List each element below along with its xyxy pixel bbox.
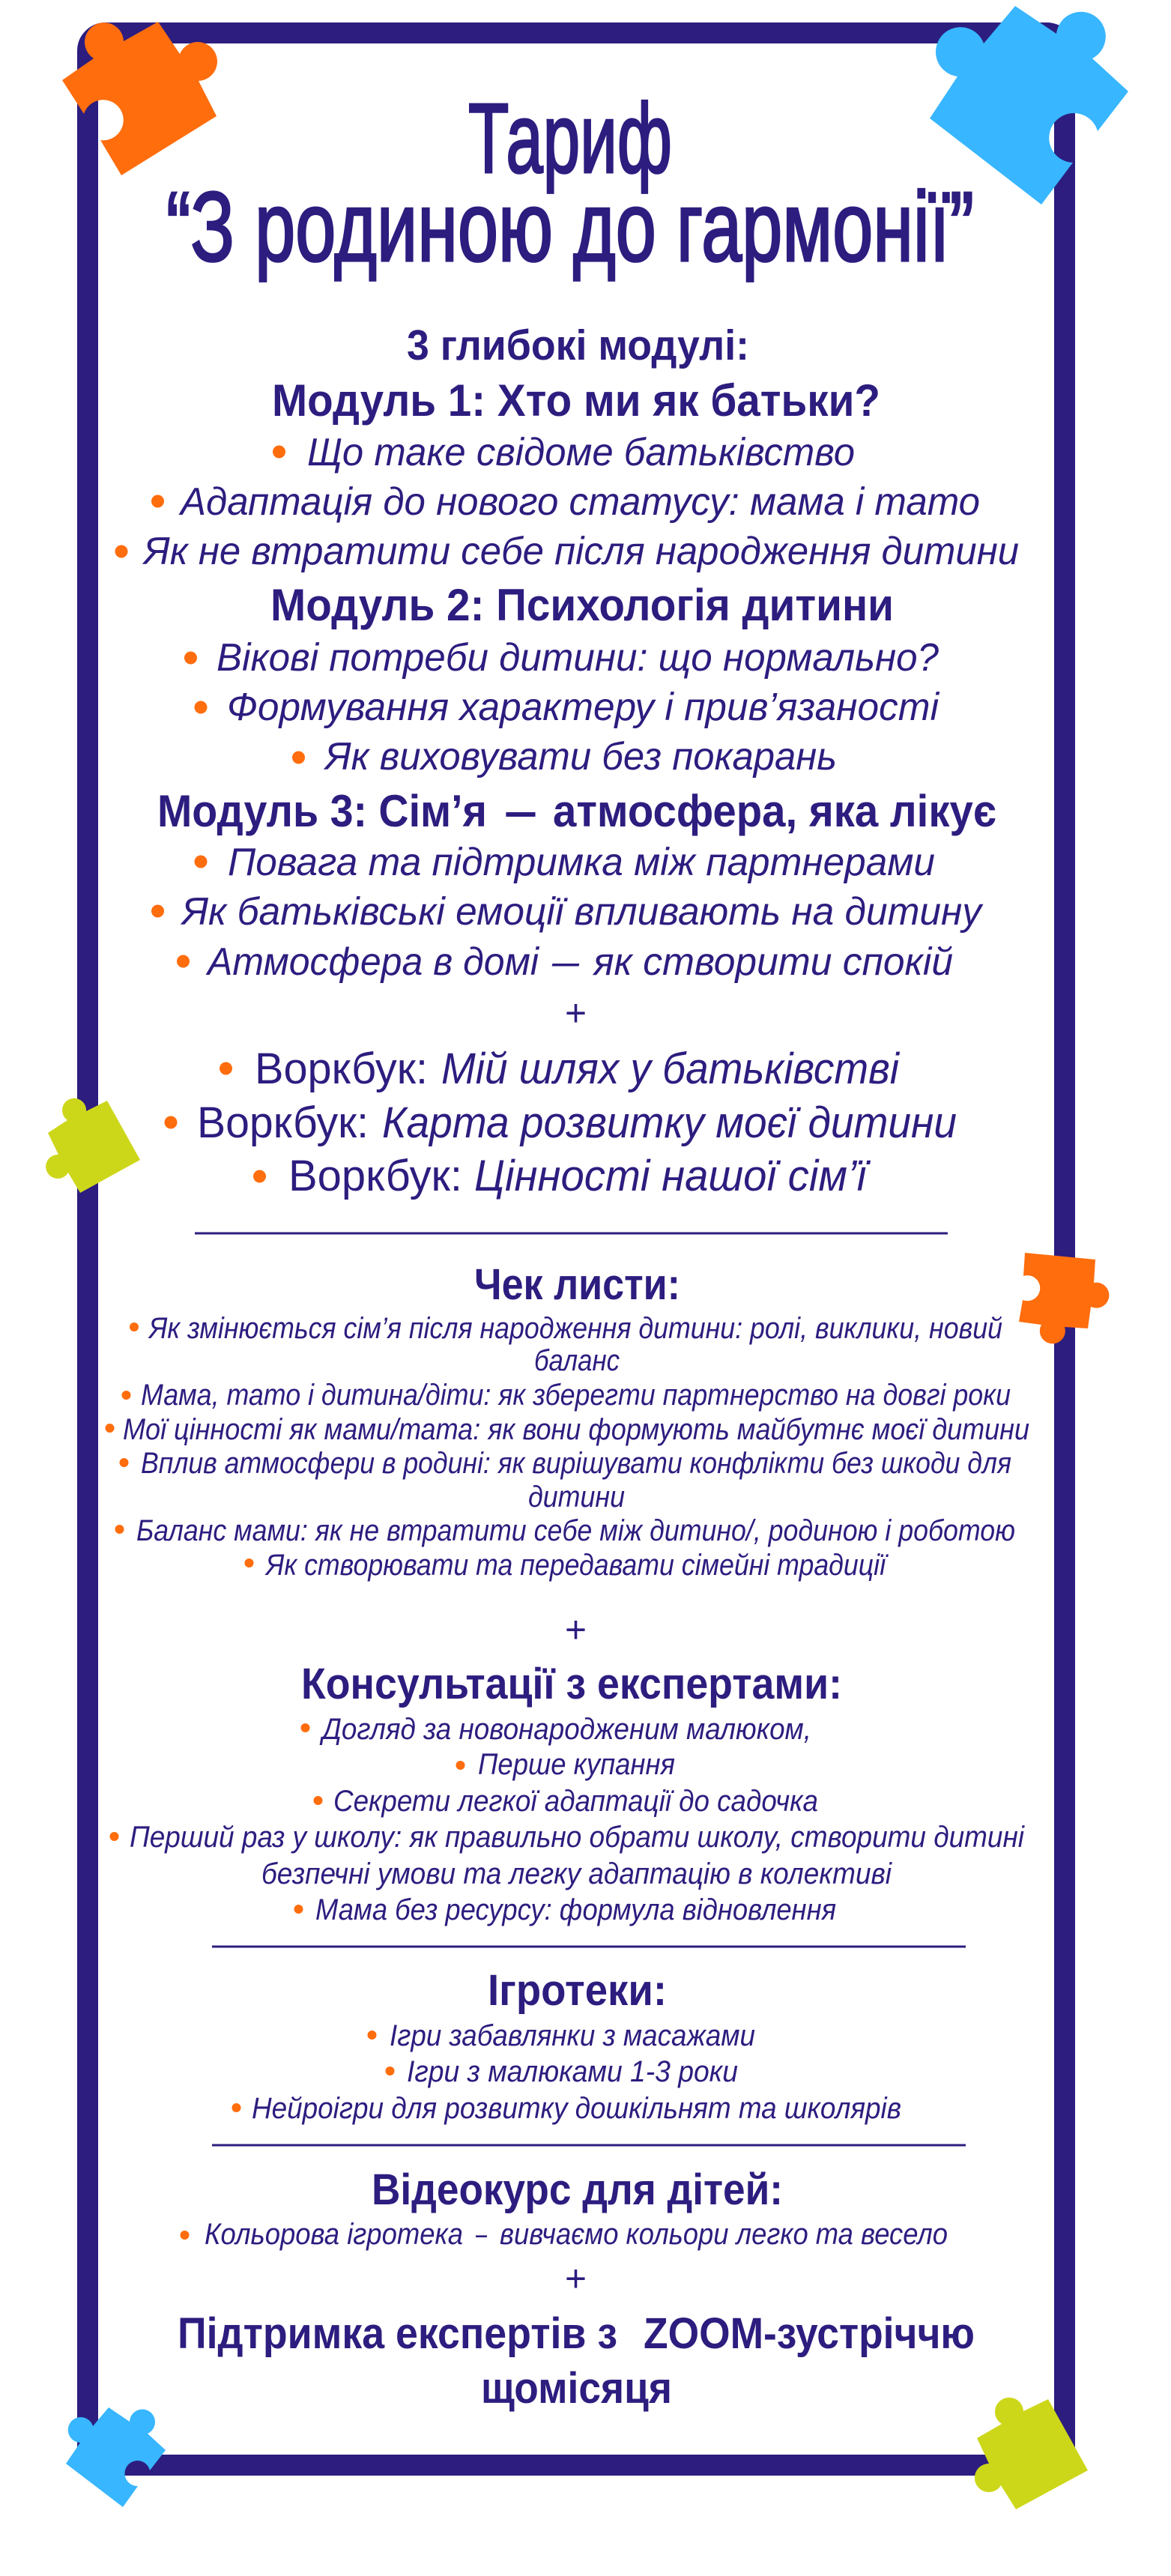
- checklist item: Вплив атмосфери в родині: як вирішувати конфлікти без шкоди для: [141, 1447, 1011, 1480]
- panel: checklists: [105, 1260, 1029, 1582]
- game item: Нейроігри для розвитку дошкільнят та школярів: [252, 2092, 901, 2125]
- heading: module 1: Модуль 1: Хто ми як батьки?: [272, 375, 880, 426]
- panel: expert consultations: [109, 1660, 1025, 1926]
- heading: video course: Відеокурс для дітей:: [372, 2165, 783, 2214]
- consultation item: безпечні умови та легку адаптацію в колективі: [261, 1857, 892, 1890]
- checklist item: Як змінюється сім’я після народження дитини: ролі, виклики, новий: [148, 1312, 1002, 1345]
- consultation item: Перший раз у школу: як правильно обрати школу, створити дитині: [130, 1821, 1025, 1854]
- closing statement: [178, 2309, 975, 2413]
- checklist item: [120, 1447, 1011, 1514]
- plus sign: +: [565, 2258, 587, 2300]
- list item: як створити спокій: [592, 940, 953, 984]
- consultation item: Секрети легкої адаптації до садочка: [333, 1785, 818, 1818]
- video course item: Кольорова ігротека: [205, 2218, 463, 2251]
- icon: blue puzzle piece top right: [930, 6, 1128, 205]
- list item: Вікові потреби дитини: що нормально?: [217, 636, 939, 680]
- consultation item: Перше купання: [478, 1748, 675, 1781]
- video course item: –: [475, 2218, 488, 2251]
- list item: Як не втратити себе після народження дитини: [142, 530, 1019, 573]
- heading: 3 modules: 3 глибокі модулі:: [407, 321, 749, 369]
- list item: [177, 940, 953, 984]
- video course item: [180, 2218, 948, 2251]
- checklist item: Мама, тато і дитина/діти: як зберегти партнерство на довгі роки: [141, 1379, 1011, 1412]
- list item: Як виховувати без покарань: [323, 735, 837, 778]
- heading: module 3: атмосфера, яка лікує: [553, 786, 996, 836]
- list item: Що таке свідоме батьківство: [307, 431, 855, 474]
- heading: consultations: Консультації з експертами:: [301, 1660, 842, 1708]
- video course item: вивчаємо кольори легко та весело: [500, 2218, 948, 2251]
- workbook item: Воркбук:: [255, 1044, 428, 1093]
- list item: Атмосфера в домі: [205, 940, 539, 984]
- closing line 1: [178, 2309, 975, 2358]
- workbook item: [165, 1098, 957, 1147]
- consultation item: Догляд за новонародженим малюком,: [319, 1713, 811, 1746]
- panel: game sessions: [232, 1966, 901, 2125]
- list item: Як батьківські емоції впливають на дитину: [180, 890, 984, 934]
- workbook item: Мій шлях у батьківстві: [441, 1044, 901, 1093]
- consultation item: [109, 1821, 1025, 1890]
- panel: modules: [115, 321, 1019, 984]
- closing line 1: Підтримка експертів з: [178, 2309, 617, 2358]
- workbook item: Воркбук:: [197, 1098, 369, 1147]
- checklist item: дитини: [528, 1481, 625, 1514]
- checklist item: Баланс мами: як не втратити себе між дитино/, родиною і роботою: [136, 1514, 1015, 1547]
- workbook item: Цінності нашої сім’ї: [474, 1152, 871, 1200]
- plus sign: +: [565, 1609, 587, 1651]
- game item: Ігри забавлянки з масажами: [390, 2019, 755, 2052]
- list item: Повага та підтримка між партнерами: [228, 841, 935, 884]
- plus sign: +: [565, 992, 587, 1034]
- title line 1: Тариф: [468, 83, 672, 193]
- list item: Формування характеру і прив’язаності: [227, 686, 939, 729]
- workbook item: Карта розвитку моєї дитини: [382, 1098, 957, 1147]
- heading: module 3: –: [504, 786, 537, 836]
- heading: game sessions: Ігротеки:: [488, 1966, 667, 2015]
- icon: orange puzzle piece right: [1019, 1253, 1109, 1343]
- heading: checklists: Чек листи:: [474, 1260, 680, 1309]
- workbook item: [253, 1152, 871, 1200]
- heading: module 2: Модуль 2: Психологія дитини: [270, 580, 894, 630]
- title: [166, 83, 974, 282]
- icon: orange puzzle piece top left: [62, 22, 217, 175]
- checklist item: [130, 1312, 1002, 1377]
- closing line 1: ZOOM-зустріччю: [644, 2309, 975, 2358]
- icon: green puzzle piece left: [46, 1098, 140, 1193]
- heading: module 3: Модуль 3: Сім’я: [157, 786, 487, 836]
- checklist item: Як створювати та передавати сімейні традиції: [264, 1549, 889, 1582]
- icon: blue puzzle piece bottom left: [66, 2407, 166, 2507]
- frame: rounded navy border: [88, 33, 1065, 2465]
- checklist item: баланс: [534, 1344, 620, 1377]
- closing line 2: щомісяця: [481, 2364, 672, 2413]
- consultation item: Мама без ресурсу: формула відновлення: [315, 1893, 836, 1926]
- workbook item: Воркбук:: [288, 1152, 462, 1200]
- game item: Ігри з малюками 1-3 роки: [407, 2055, 738, 2088]
- list item: Адаптація до нового статусу: мама і тато: [178, 480, 980, 524]
- list item: –: [551, 940, 580, 984]
- checklist item: Мої цінності як мами/тата: як вони формують майбутнє моєї дитини: [123, 1413, 1029, 1446]
- workbook item: [220, 1044, 901, 1093]
- heading: module 3: [157, 786, 996, 836]
- panel: workbooks: [165, 1044, 957, 1200]
- icon: green puzzle piece bottom right: [975, 2398, 1088, 2509]
- panel: video course: [180, 2165, 948, 2251]
